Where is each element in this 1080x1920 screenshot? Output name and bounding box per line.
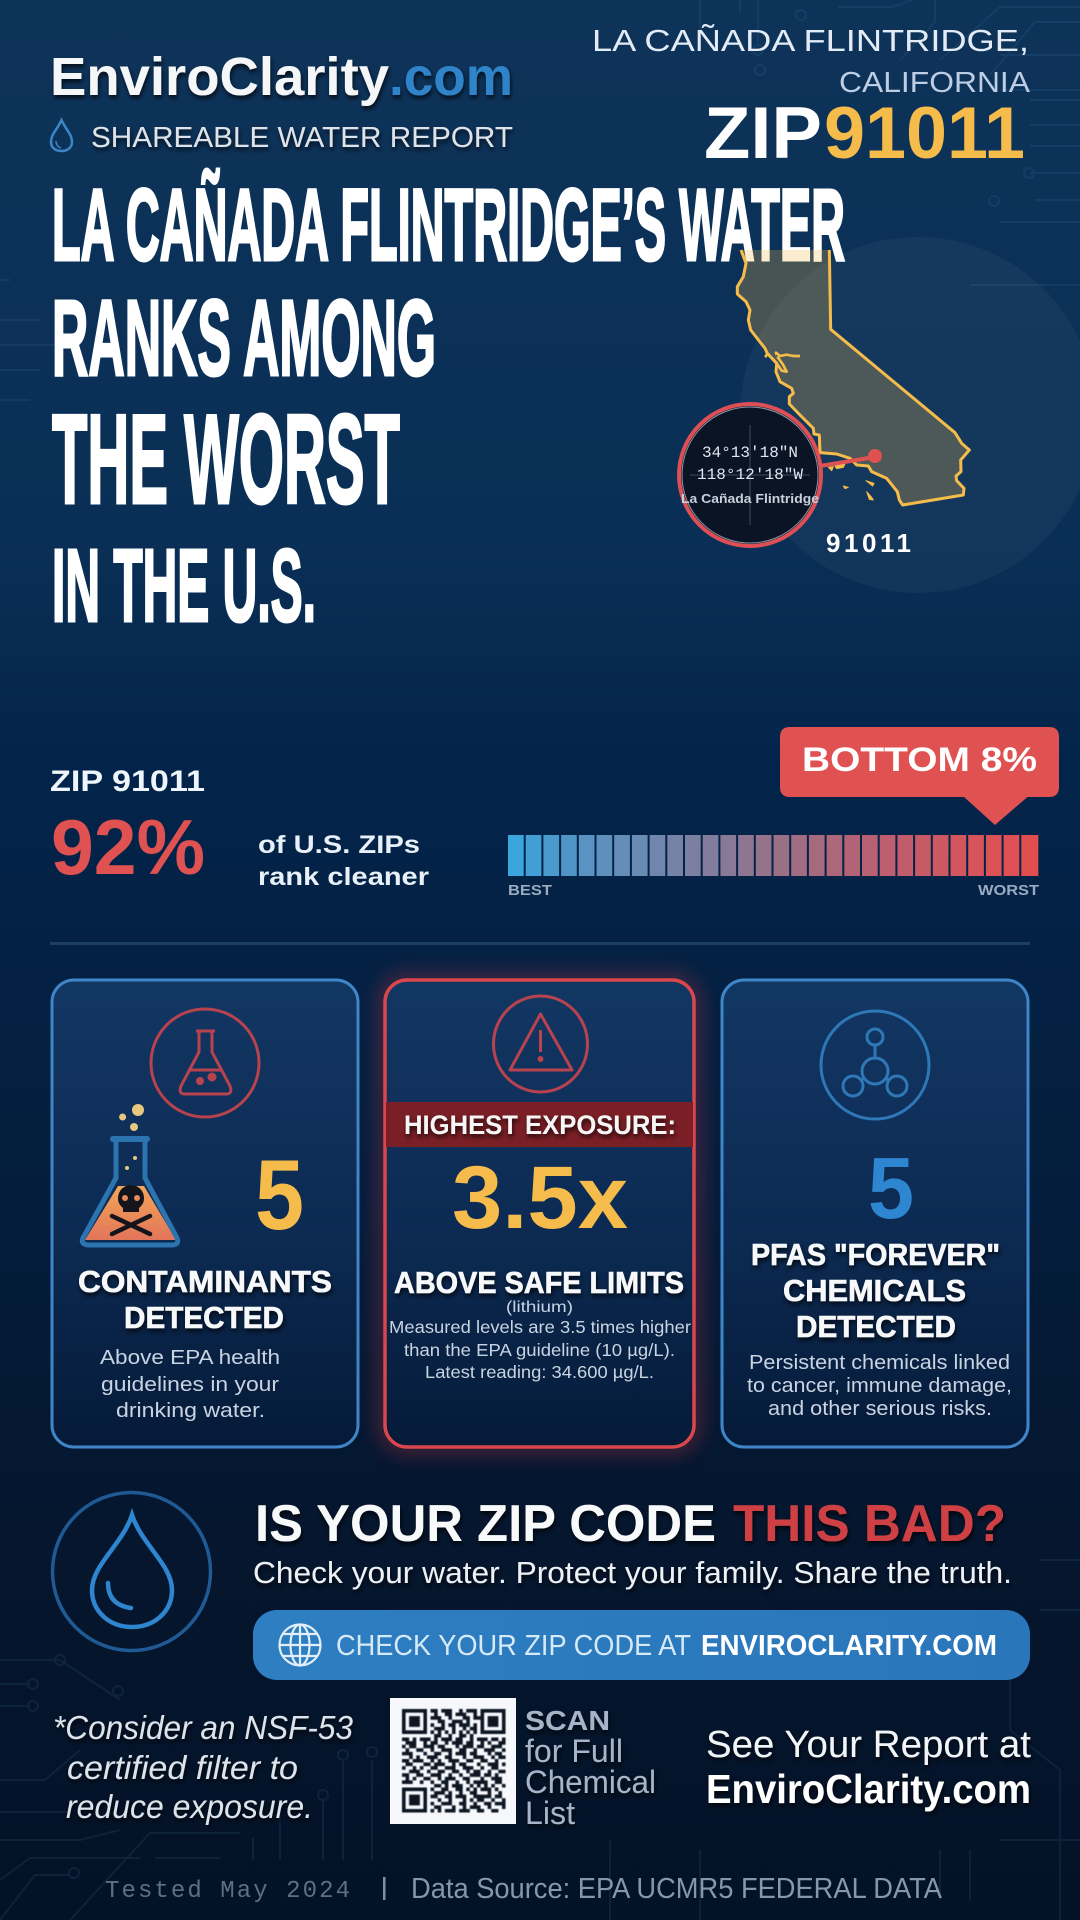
banner xyxy=(386,1102,693,1147)
cta button: CHECK YOUR ZIP CODE AT xyxy=(336,1630,691,1662)
scan label: List xyxy=(525,1795,575,1831)
card body: Persistent chemicals linked xyxy=(749,1352,1010,1374)
report link: See Your Report at xyxy=(706,1724,1031,1766)
location heading: 91011 xyxy=(824,93,1025,174)
icon: globe xyxy=(280,1624,320,1666)
card body: Above EPA health xyxy=(100,1347,280,1369)
panel: contaminants detected xyxy=(52,980,358,1447)
card body: guidelines in your xyxy=(101,1374,279,1396)
card heading: DETECTED xyxy=(124,1300,284,1335)
icon: header water drop xyxy=(51,120,72,151)
scan label: SCAN xyxy=(525,1705,610,1736)
card heading: DETECTED xyxy=(796,1309,956,1344)
location heading: LA CAÑADA FLINTRIDGE, xyxy=(592,23,1029,58)
rank stats: of U.S. ZIPs xyxy=(258,831,420,859)
footer: Tested May 2024 xyxy=(105,1878,350,1905)
card heading: PFAS "FOREVER" xyxy=(751,1237,1000,1272)
scan label: for Full xyxy=(525,1733,623,1769)
main title: RANKS AMONG xyxy=(52,277,436,398)
card body: Latest reading: 34.600 µg/L. xyxy=(425,1362,654,1382)
card body xyxy=(747,1352,1012,1420)
rank stats: rank cleaner xyxy=(258,863,429,891)
banner: HIGHEST EXPOSURE: xyxy=(404,1110,676,1140)
rank stats: ZIP 91011 xyxy=(50,765,205,798)
callout: bottom 8%: BOTTOM 8% xyxy=(802,741,1037,779)
footer xyxy=(105,1873,943,1905)
panel: pfas forever chemicals xyxy=(722,980,1028,1447)
coordinate circle: 34°13′18″N xyxy=(702,444,798,462)
rank gradient bar xyxy=(508,835,1039,899)
card body: drinking water. xyxy=(116,1400,265,1422)
scan label xyxy=(525,1705,656,1831)
rank gradient bar: WORST xyxy=(978,882,1039,899)
cta button xyxy=(253,1610,1030,1680)
icon: poison flask xyxy=(82,1104,178,1245)
footer: Data Source: EPA UCMR5 FEDERAL DATA xyxy=(411,1873,943,1905)
cta button: ENVIROCLARITY.COM xyxy=(701,1630,997,1662)
stat: 5: 5 xyxy=(868,1140,914,1237)
rank gradient bar: BEST xyxy=(508,882,552,899)
filter note: certified filter to xyxy=(67,1749,298,1786)
icon: molecule circle xyxy=(821,1011,929,1119)
location heading: CALIFORNIA xyxy=(839,67,1031,99)
callout: bottom 8% xyxy=(780,727,1059,825)
subtitle: shareable water report: SHAREABLE WATER REPORT xyxy=(91,122,513,154)
icon: warning circle xyxy=(494,996,588,1092)
scan label: Chemical xyxy=(525,1764,656,1800)
cta heading: THIS BAD? xyxy=(733,1495,1006,1553)
coordinate circle: 118°12′18″W xyxy=(697,466,803,484)
card body: than the EPA guideline (10 µg/L). xyxy=(404,1340,675,1360)
coordinate circle xyxy=(679,404,821,546)
qr code xyxy=(390,1698,516,1824)
icon: flask circle xyxy=(151,1009,259,1117)
filter note: *Consider an NSF-53 xyxy=(53,1709,354,1746)
card body: Measured levels are 3.5 times higher xyxy=(389,1317,691,1337)
report link: EnviroClarity.com xyxy=(706,1766,1031,1812)
card body xyxy=(100,1347,280,1422)
filter note: reduce exposure. xyxy=(66,1788,313,1825)
card body: and other serious risks. xyxy=(768,1398,992,1420)
stat: 5: 5 xyxy=(255,1139,304,1250)
logo: EnviroClarity xyxy=(50,47,389,107)
card body: to cancer, immune damage, xyxy=(747,1375,1012,1397)
coordinate circle: La Cañada Flintridge xyxy=(681,491,819,506)
cta heading: IS YOUR ZIP CODE xyxy=(255,1495,716,1553)
card heading xyxy=(78,1264,332,1335)
card heading: CONTAMINANTS xyxy=(78,1264,332,1299)
card heading xyxy=(751,1237,1000,1344)
report link xyxy=(706,1724,1031,1812)
California outline xyxy=(737,250,969,505)
main title xyxy=(52,168,845,643)
map highlight circle xyxy=(740,237,1080,593)
main title: THE WORST xyxy=(52,388,400,530)
main title: IN THE U.S. xyxy=(52,528,316,643)
card body xyxy=(389,1299,691,1382)
card body: (lithium) xyxy=(506,1299,573,1316)
cta subheading: Check your water. Protect your family. Share the truth. xyxy=(253,1555,1012,1590)
map: California with callout xyxy=(679,250,969,558)
rank stats: 92% xyxy=(51,803,205,891)
map zip label: 91011 xyxy=(826,528,911,558)
location heading xyxy=(592,23,1031,174)
pin dot xyxy=(868,449,882,463)
location heading: ZIP xyxy=(704,93,822,174)
logo: .com xyxy=(389,47,513,107)
cta heading xyxy=(255,1495,1006,1553)
panel: highest exposure xyxy=(385,980,694,1447)
card heading: CHEMICALS xyxy=(783,1273,966,1308)
icon: large water drop xyxy=(52,1492,210,1650)
rank stats xyxy=(50,765,429,891)
stat: 3.5x: 3.5x xyxy=(452,1147,628,1247)
pin line xyxy=(820,457,875,466)
card heading: ABOVE SAFE LIMITS xyxy=(394,1265,684,1300)
filter note xyxy=(53,1709,354,1825)
